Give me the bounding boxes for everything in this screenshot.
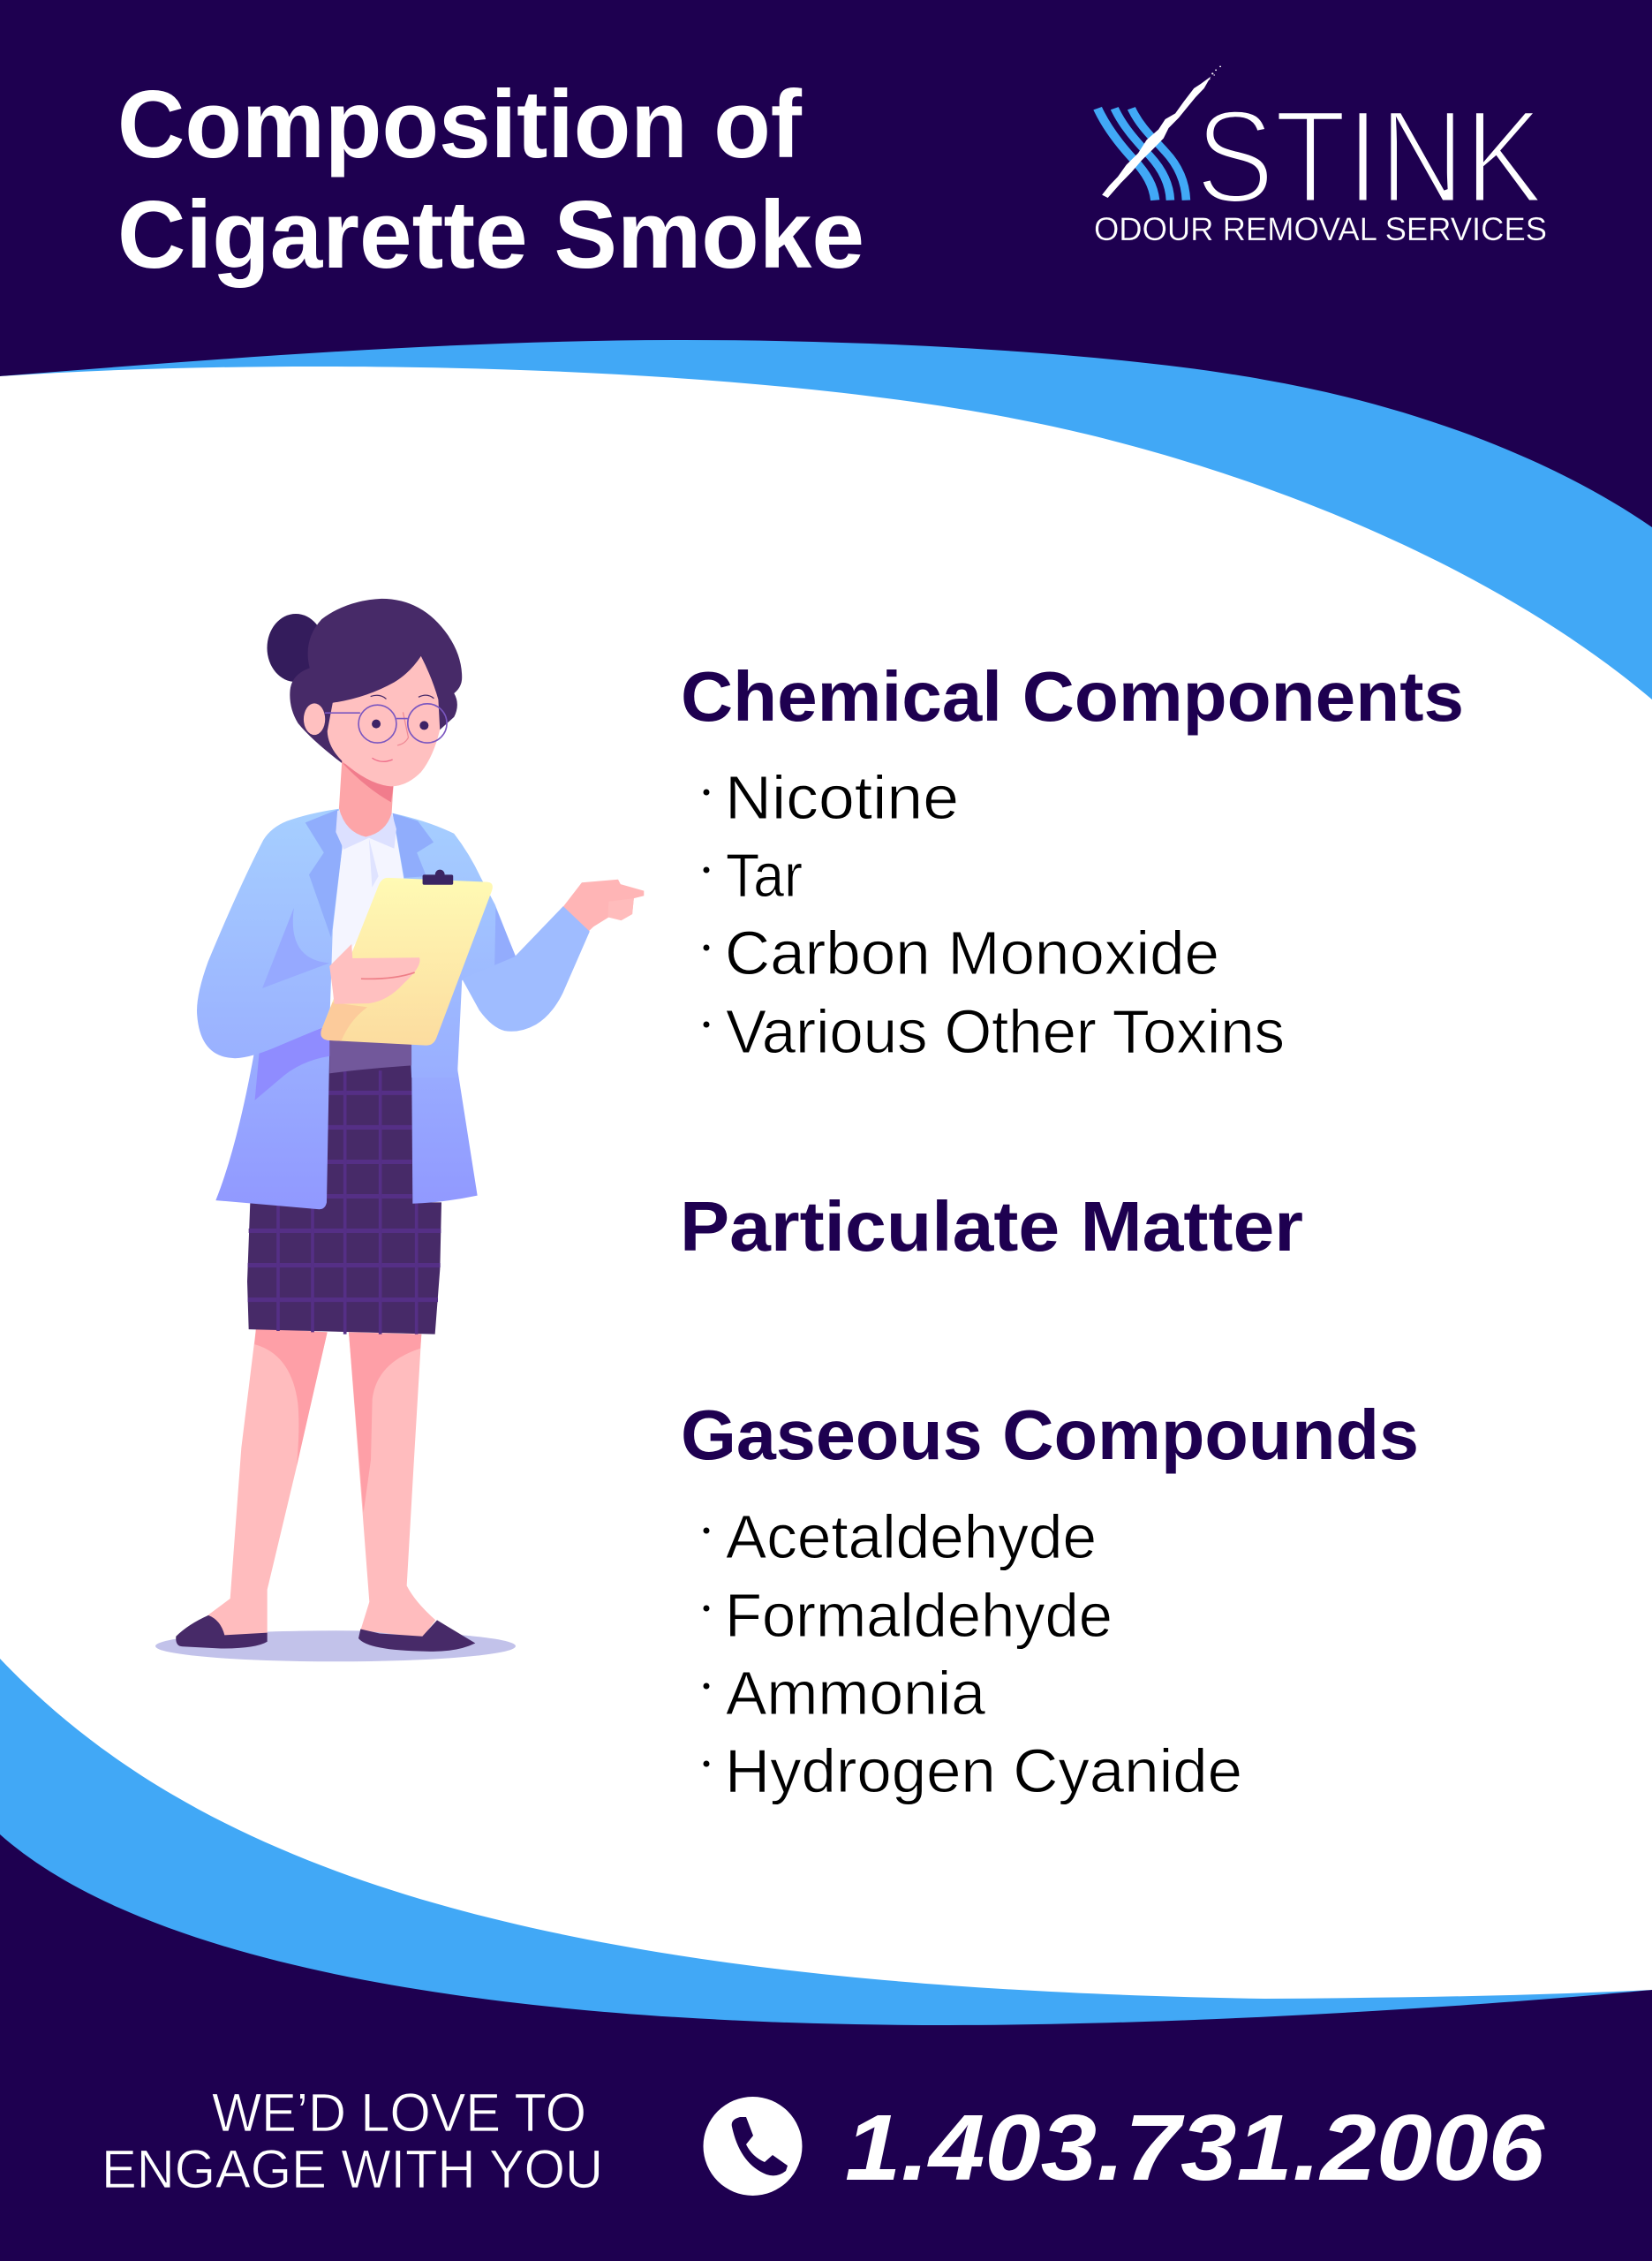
collar: [336, 811, 396, 850]
footer call to action text: ENGAGE WITH YOU: [102, 2139, 603, 2199]
upper body: [197, 599, 644, 1100]
lower body: [176, 1042, 478, 1652]
brows: [371, 695, 434, 699]
coat left shoulder and sleeve: [197, 809, 342, 1058]
pointing hand: [555, 880, 644, 940]
list: gaseous compounds: [703, 1502, 1242, 1805]
title: [117, 71, 864, 289]
list: gaseous compounds: Formaldehyde: [725, 1581, 1113, 1650]
list: chemical components: [703, 763, 1285, 1066]
logo tagline: ODOUR REMOVAL SERVICES: [1094, 210, 1547, 247]
neck shadow: [342, 763, 394, 802]
top blue wave: [0, 340, 1652, 795]
title: Cigarette Smoke: [117, 181, 864, 289]
clipboard: [321, 878, 493, 1046]
heading: particulate matter: Particulate Matter: [680, 1187, 1303, 1266]
neck: [339, 758, 394, 836]
heading: gaseous compounds: Gaseous Compounds: [681, 1395, 1419, 1474]
coat right panel: [411, 1042, 478, 1204]
ear: [304, 703, 325, 735]
left leg shade: [254, 1328, 328, 1466]
thumb line: [361, 972, 415, 979]
coat left panel: [215, 1042, 329, 1209]
list: chemical components: Carbon Monoxide: [725, 919, 1219, 987]
right lapel: [393, 813, 434, 878]
list: chemical components: Various Other Toxins: [726, 997, 1285, 1066]
smile: [372, 758, 393, 761]
left leg: [208, 1328, 328, 1638]
glasses: [325, 704, 447, 743]
right arm sleeve: [462, 906, 590, 1032]
waist strip: [329, 1037, 411, 1073]
list: gaseous compounds: Hydrogen Cyanide: [725, 1736, 1242, 1805]
hair: [290, 599, 462, 763]
list: chemical components: Tar: [726, 841, 803, 910]
logo mark: blue stripes and white brush stroke: [1098, 65, 1221, 200]
holding hand: [329, 944, 420, 1004]
clipboard clip: [423, 870, 453, 885]
section: gaseous compounds: [681, 1395, 1419, 1805]
coat side shade: [494, 908, 516, 974]
white content panel: [0, 367, 1652, 1999]
icon: phone: [703, 2097, 802, 2196]
plaid skirt: [247, 1042, 441, 1335]
phone number: 1.403.731.2006: [845, 2096, 1545, 2200]
right leg: [349, 1332, 435, 1637]
coat dark inner wedge: [255, 1025, 330, 1100]
list: chemical components: Nicotine: [725, 763, 959, 832]
nose: [397, 712, 408, 745]
list: gaseous compounds: Ammonia: [726, 1659, 985, 1728]
coat sleeve shade: [262, 908, 329, 988]
title: Composition of: [117, 71, 803, 178]
list: gaseous compounds: Acetaldehyde: [726, 1502, 1097, 1571]
coat right side: [393, 813, 516, 1078]
footer call to action text: [102, 2083, 603, 2199]
heading: chemical components: Chemical Components: [681, 657, 1464, 736]
ground shadow: [155, 1630, 516, 1661]
logo wordmark: STINK: [1196, 82, 1543, 231]
figure: woman with clipboard: [155, 599, 644, 1661]
right shoe: [358, 1620, 475, 1652]
shirt: [329, 810, 404, 966]
left lapel: [306, 809, 342, 938]
clipboard shade: [321, 1002, 367, 1041]
bottom blue wave: [0, 1501, 1652, 2025]
shirt placket: [369, 838, 379, 888]
face: [328, 656, 440, 786]
logo: Stink Odour Removal Services: [1094, 65, 1547, 247]
section: chemical components: [681, 657, 1464, 1066]
left shoe: [176, 1615, 268, 1649]
hair bun: [267, 614, 324, 682]
footer call to action text: WE’D LOVE TO: [212, 2083, 586, 2143]
right leg shade: [349, 1332, 421, 1513]
eyes: [372, 720, 428, 730]
